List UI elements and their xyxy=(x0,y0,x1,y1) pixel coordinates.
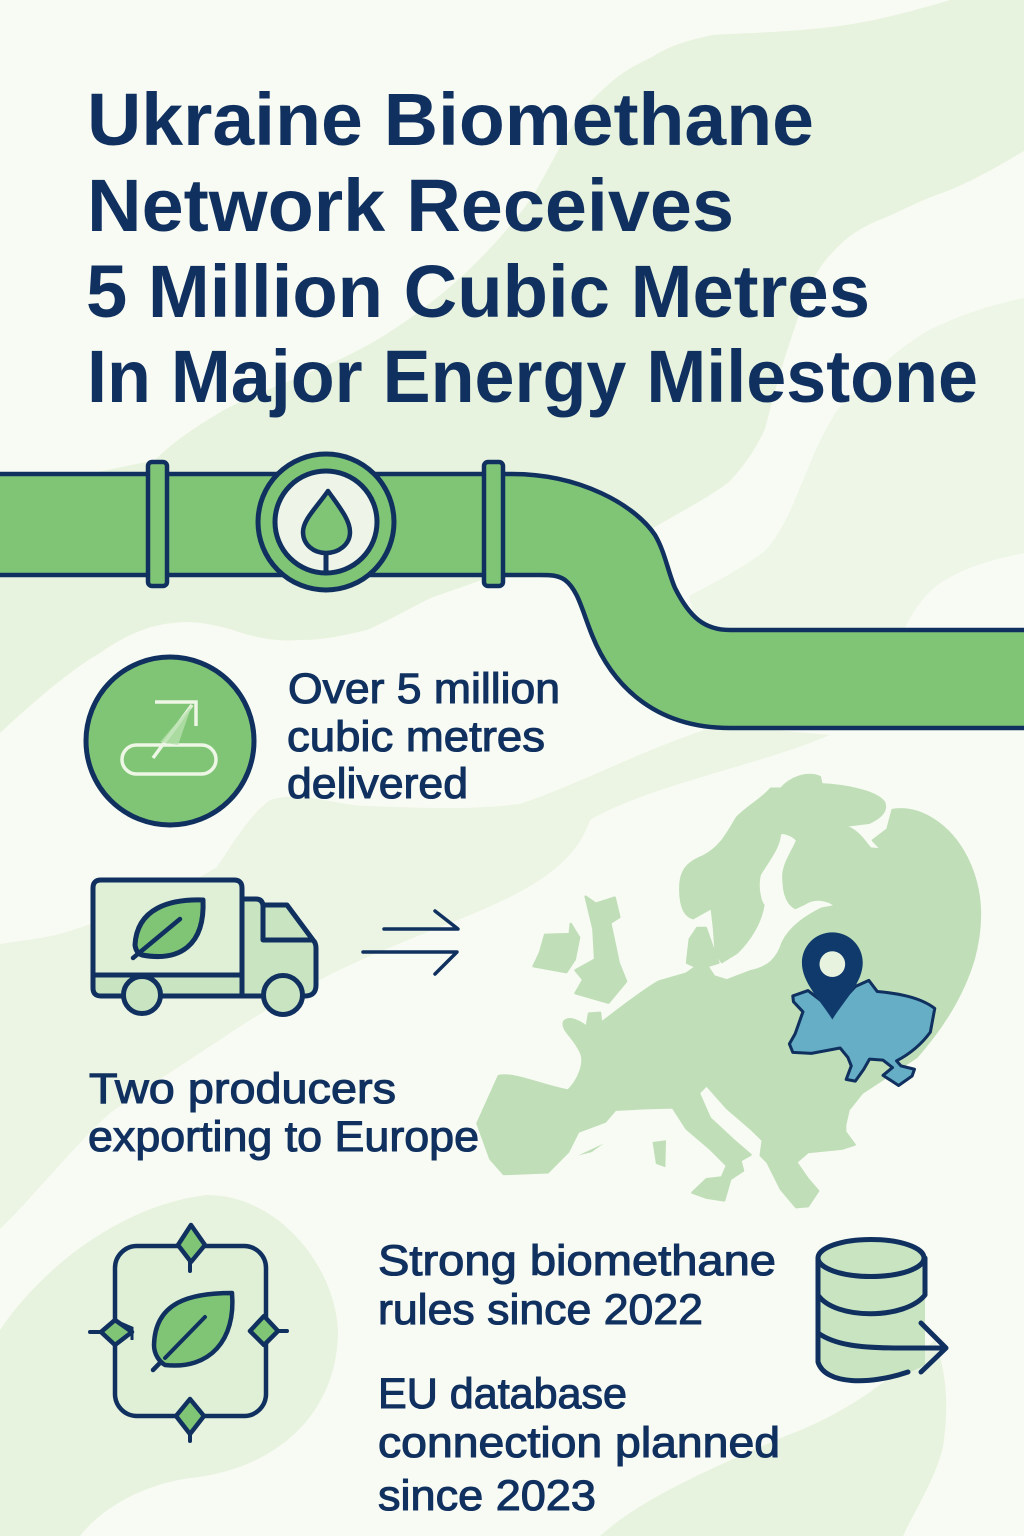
text: volume delivered: cubic metres xyxy=(287,713,545,761)
icon: regulation frame with leaf xyxy=(90,1225,287,1441)
pipeline with droplet valve xyxy=(0,454,1024,728)
map: Ukraine xyxy=(789,980,935,1085)
text: EU database connection: since 2023 xyxy=(378,1472,596,1520)
map: Great Britain xyxy=(575,897,626,1003)
valve ring xyxy=(258,454,394,590)
text: producers exporting: exporting to Europe xyxy=(88,1113,479,1161)
text: volume delivered: Over 5 million xyxy=(288,665,560,713)
map: Mediterranean islands xyxy=(578,1140,666,1167)
text: producers exporting xyxy=(88,1065,479,1161)
icon: droplet xyxy=(303,491,350,571)
title xyxy=(86,78,978,418)
map: Europe with Ukraine highlighted xyxy=(477,775,980,1207)
icon: delivered volume circle xyxy=(86,657,254,825)
text: EU database connection xyxy=(378,1370,780,1520)
map: Ireland xyxy=(534,924,579,972)
text: EU database connection: EU database xyxy=(378,1370,627,1418)
icon: database with arrow xyxy=(818,1240,946,1381)
text: volume delivered: delivered xyxy=(287,760,468,808)
title: 5 Million Cubic Metres xyxy=(86,250,870,333)
title: Ukraine Biomethane xyxy=(87,78,814,161)
icon: delivery truck with leaf xyxy=(93,880,316,1014)
text: biomethane rules: rules since 2022 xyxy=(378,1286,703,1334)
text: biomethane rules xyxy=(378,1237,776,1334)
text: EU database connection: connection planned xyxy=(378,1419,780,1467)
title: Network Receives xyxy=(87,164,734,247)
title: In Major Energy Milestone xyxy=(87,335,978,418)
arrows: export direction xyxy=(363,911,458,974)
icon: map pin xyxy=(802,932,863,1020)
map: Europe landmass xyxy=(477,775,980,1207)
pipe flange right xyxy=(484,462,503,586)
text: volume delivered xyxy=(287,665,560,808)
text: producers exporting: Two producers xyxy=(89,1065,396,1113)
pipe flange left xyxy=(148,462,167,586)
text: biomethane rules: Strong biomethane xyxy=(378,1237,776,1285)
icon: leaf on truck xyxy=(133,900,203,958)
